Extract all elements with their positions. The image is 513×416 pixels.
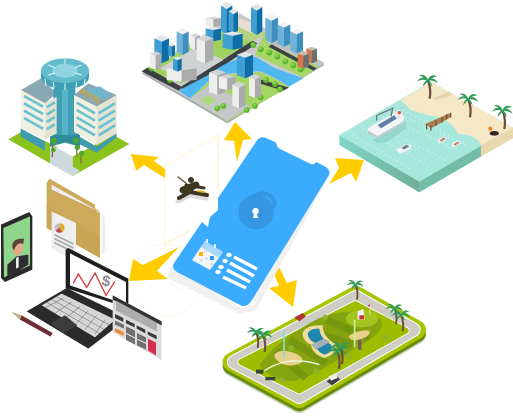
boats xyxy=(396,137,461,154)
arrow: to office xyxy=(129,247,179,281)
illustration: calculator xyxy=(113,295,162,360)
arrows xyxy=(129,122,364,307)
illustration: folder with report xyxy=(47,179,105,261)
pond and bunkers xyxy=(274,310,378,365)
illustration: city block xyxy=(142,1,324,123)
ball trajectory xyxy=(264,361,319,371)
arrow: to city xyxy=(224,122,252,162)
chart line xyxy=(73,273,115,295)
flag and golfer xyxy=(358,304,370,350)
illustration: golf course xyxy=(232,280,417,404)
illustration: smartphone video call xyxy=(1,212,32,282)
icon: calendar xyxy=(192,239,223,270)
campfire xyxy=(488,127,499,136)
illustration: hotel building xyxy=(8,58,129,176)
illustration: central smartphone xyxy=(168,137,330,314)
upper-left quarter xyxy=(148,28,252,83)
illustration: laptop with chart xyxy=(27,248,128,349)
lower quarter xyxy=(190,72,289,122)
arrow: to hotel xyxy=(131,154,165,178)
fairway xyxy=(259,312,382,381)
arrow: to golf xyxy=(269,265,297,307)
phone screen xyxy=(173,137,330,306)
report page xyxy=(52,211,76,261)
pier xyxy=(425,113,452,131)
icon: ninja silhouette xyxy=(178,177,207,201)
hotel sign: HOTEL xyxy=(78,86,104,106)
illustration: laptop with chart: $ xyxy=(100,273,112,291)
river xyxy=(178,57,303,98)
illustration: tropical beach and sea xyxy=(339,75,513,192)
icon: pen xyxy=(12,312,53,337)
icon: padlock xyxy=(238,193,275,230)
icon: checklist xyxy=(215,253,257,288)
ship xyxy=(368,108,406,143)
arrow: to beach xyxy=(329,158,364,184)
upper-right quarter xyxy=(255,32,324,77)
panel: faint document outline xyxy=(129,135,228,316)
carts xyxy=(256,313,340,385)
